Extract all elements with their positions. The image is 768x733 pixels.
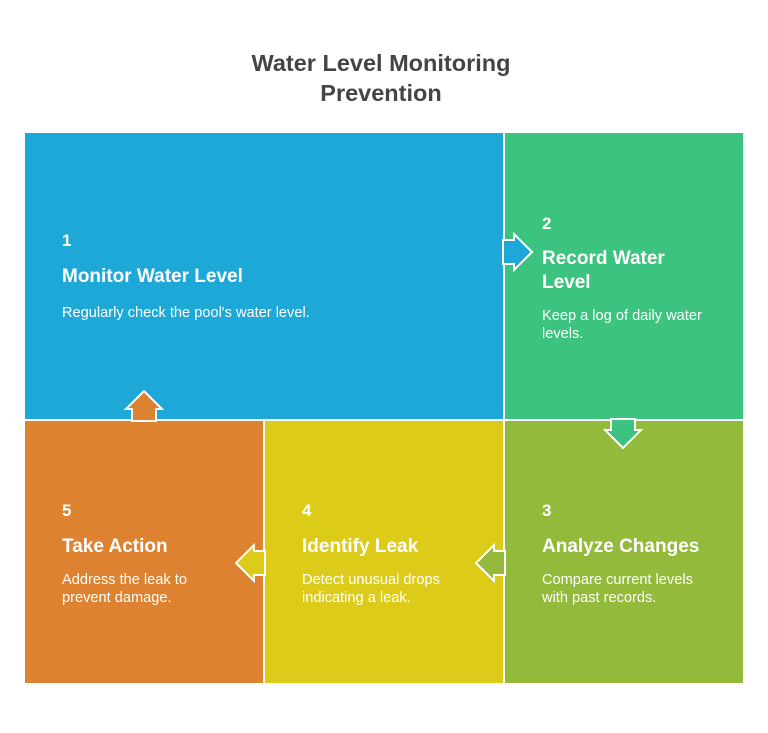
panel: step 2 record: Level: [542, 272, 591, 293]
panel: step 5 take action: Address the leak to: [62, 572, 187, 588]
arrow: 1 to 2: [503, 234, 532, 270]
panel: step 1 monitor: 1: [62, 231, 71, 250]
panel: step 5 take action: Take Action: [62, 536, 168, 557]
panel: step 2 record: 2: [542, 214, 551, 233]
panel: step 5 take action: [25, 421, 263, 683]
panel: step 2 record: Keep a log of daily water: [542, 308, 702, 324]
panel: step 5 take action: prevent damage.: [62, 590, 172, 606]
panel: step 4 identify leak: 4: [302, 501, 312, 520]
arrow: 5 to 1: [126, 391, 162, 421]
panel: step 3 analyze: with past records.: [541, 590, 656, 606]
panel: step 5 take action: 5: [62, 501, 71, 520]
panel: step 3 analyze: 3: [542, 501, 551, 520]
title: Prevention: [320, 80, 442, 106]
panel: step 4 identify leak: indicating a leak.: [302, 590, 411, 606]
title: Water Level Monitoring: [252, 50, 510, 76]
panel: step 2 record: [505, 133, 743, 419]
panel: step 1 monitor: Regularly check the pool's water level.: [62, 305, 310, 321]
panel: step 2 record: levels.: [542, 326, 583, 342]
panel: step 3 analyze: Compare current levels: [542, 572, 693, 588]
arrow: 2 to 3: [605, 419, 641, 448]
panel: step 4 identify leak: Detect unusual drops: [302, 572, 440, 588]
title: [252, 50, 510, 106]
arrow: 4 to 5: [236, 545, 265, 581]
panel: step 3 analyze: [505, 421, 743, 683]
panel: step 4 identify leak: [265, 421, 503, 683]
panel: step 2 record: Record Water: [542, 248, 665, 269]
panel: step 1 monitor: [25, 133, 503, 419]
panel: step 3 analyze: Analyze Changes: [542, 536, 699, 557]
arrow: 3 to 4: [476, 545, 505, 581]
panel: step 1 monitor: Monitor Water Level: [62, 266, 243, 287]
panel: step 4 identify leak: Identify Leak: [302, 536, 419, 557]
